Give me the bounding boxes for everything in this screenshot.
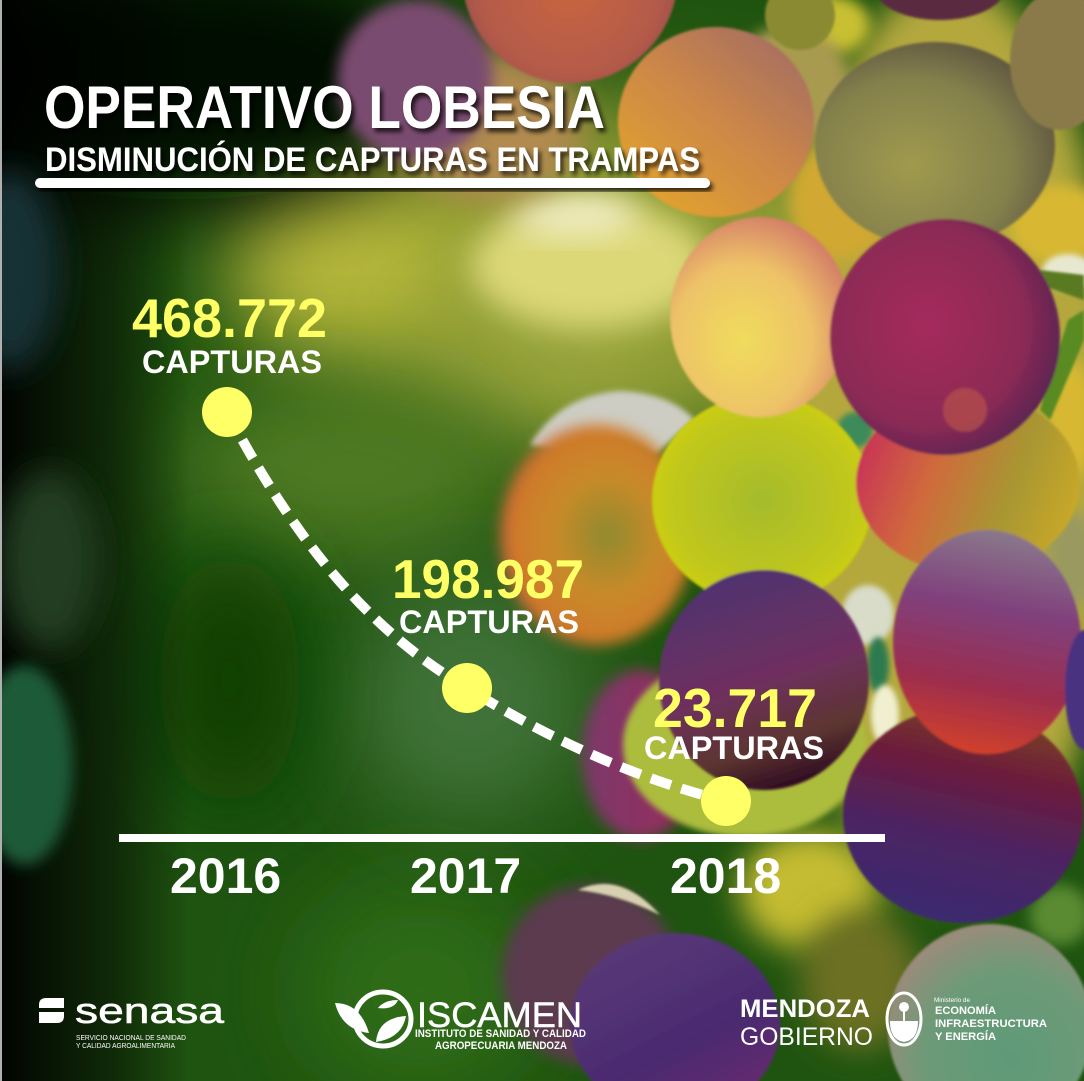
title: OPERATIVO LOBESIA <box>44 74 605 141</box>
logo: Mendoza Gobierno <box>740 993 1047 1051</box>
value 2018: CAPTURAS <box>644 730 824 766</box>
subtitle: DISMINUCIÓN DE CAPTURAS EN TRAMPAS <box>45 141 700 179</box>
senasa icon <box>39 998 64 1023</box>
logo: senasa <box>39 990 225 1050</box>
value 2017: 198.987 <box>392 548 584 610</box>
data point 2018 <box>701 776 751 826</box>
logo: ISCAMEN: INSTITUTO DE SANIDAD Y CALIDAD <box>415 1028 586 1040</box>
leaf emblem <box>335 992 411 1046</box>
logo: Mendoza Gobierno: Y ENERGÍA <box>935 1030 996 1043</box>
year labels <box>170 848 781 904</box>
thin left image edge <box>0 0 2 1081</box>
logo: senasa: Y CALIDAD AGROALIMENTARIA <box>76 1043 175 1050</box>
logo: Mendoza Gobierno: Ministerio de <box>934 997 970 1004</box>
dashed trend line <box>227 412 726 801</box>
logo: Mendoza Gobierno: MENDOZA <box>740 995 870 1023</box>
year labels: 2018 <box>670 848 781 904</box>
logo: Mendoza Gobierno: INFRAESTRUCTURA <box>935 1018 1047 1030</box>
x axis <box>119 834 885 842</box>
logo: senasa: SERVICIO NACIONAL DE SANIDAD <box>76 1035 186 1042</box>
year labels: 2016 <box>170 848 281 904</box>
data point 2017 <box>442 663 492 713</box>
value 2018 <box>644 677 824 766</box>
gaps behind the sharp grape cluster <box>740 0 1084 1050</box>
data point 2016 <box>202 387 252 437</box>
value 2017 <box>392 548 584 640</box>
coat of arms <box>887 993 921 1045</box>
title underline <box>35 178 710 188</box>
logo: Mendoza Gobierno: GOBIERNO <box>740 1023 873 1051</box>
out-of-focus grapes <box>337 0 867 1065</box>
logo: ISCAMEN <box>335 992 586 1052</box>
logo: ISCAMEN: ISCAMEN <box>417 996 582 1035</box>
logo: senasa: senasa <box>75 990 225 1031</box>
value 2018: 23.717 <box>653 677 817 739</box>
logo: Mendoza Gobierno: ECONOMÍA <box>935 1004 996 1017</box>
value 2016 <box>132 287 327 380</box>
value 2016: CAPTURAS <box>142 344 322 380</box>
year labels: 2017 <box>410 848 521 904</box>
value 2017: CAPTURAS <box>399 604 579 640</box>
sharp grapes <box>462 0 1084 1081</box>
line chart: captures per year <box>119 287 885 904</box>
value 2016: 468.772 <box>132 287 327 349</box>
logo: ISCAMEN: AGROPECUARIA MENDOZA <box>435 1040 567 1052</box>
